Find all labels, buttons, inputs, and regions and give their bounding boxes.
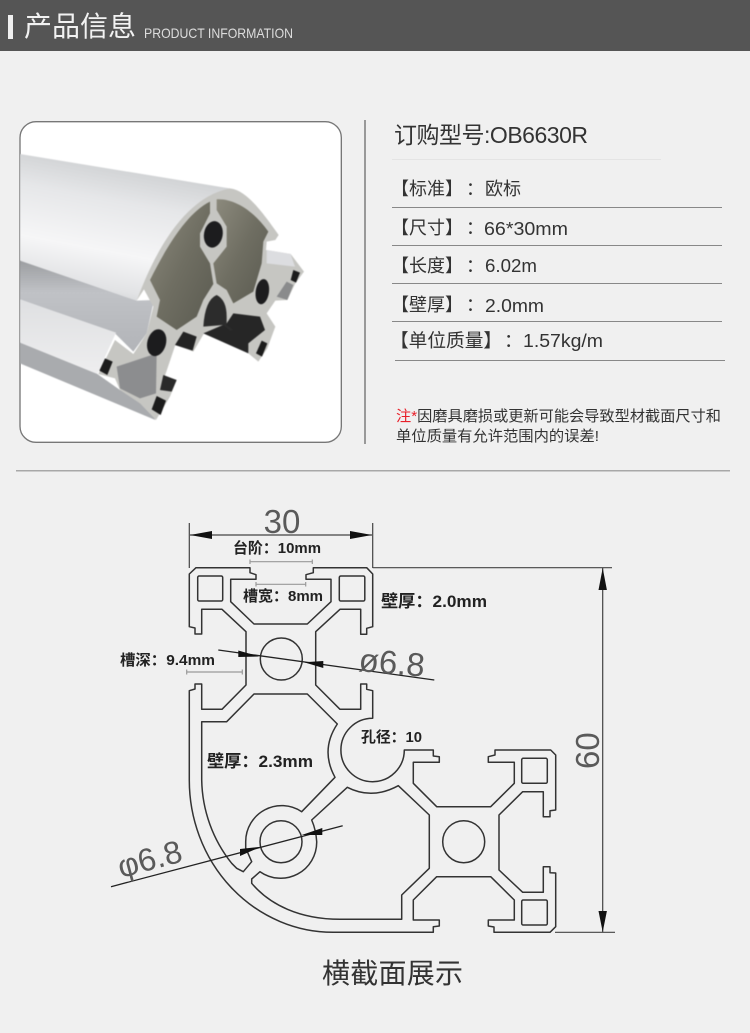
photo: side channel <box>20 261 154 352</box>
height dimension 60 <box>373 568 615 932</box>
spec row: length: 6.02m <box>485 256 537 276</box>
spec row: size: 66*30mm <box>484 219 568 239</box>
label: slot width: 槽宽：8mm <box>243 587 323 605</box>
diameter callout upper: ø6.8 <box>357 641 426 684</box>
order model heading: 订购型号:OB6630R <box>394 122 588 148</box>
header band <box>0 0 750 51</box>
header band: 产品信息 <box>24 11 136 42</box>
inner cavity left <box>202 694 337 872</box>
inner cavity right <box>252 786 429 919</box>
spec row: length: 【长度】 <box>391 256 463 276</box>
spec row: standard <box>391 179 722 208</box>
photo: square holes <box>291 270 300 283</box>
vertical divider <box>364 120 366 444</box>
diameter callout upper <box>218 641 434 684</box>
width dimension 30: 30 <box>264 503 300 540</box>
photo: bottom side <box>20 343 155 420</box>
spec row: wall thickness: 2.0mm <box>485 296 544 316</box>
spec row: standard: 【标准】 <box>391 179 463 199</box>
profile outline <box>189 568 556 932</box>
spec row: size: 【尺寸】 <box>391 218 463 238</box>
photo: lower lip <box>20 299 116 374</box>
spec row: wall thickness: ： <box>466 295 484 315</box>
spec row: unit mass: 【单位质量】 <box>390 330 502 351</box>
note text <box>396 408 721 445</box>
spec row: length <box>391 256 722 284</box>
width dimension 30 <box>189 503 373 568</box>
spec row: unit mass: 1.57kg/m <box>523 331 603 351</box>
spec row: standard: 欧标 <box>485 179 521 199</box>
label: hole diameter: 孔径：10 <box>361 729 422 746</box>
spec row: length: ： <box>466 256 484 276</box>
diameter callout lower: φ6.8 <box>113 833 186 885</box>
spec row: size: ： <box>466 218 484 238</box>
spec table <box>390 179 725 361</box>
photo: end face <box>98 188 304 420</box>
photo: round holes <box>203 220 224 248</box>
panel: product photo <box>20 122 341 442</box>
label: step width: 台阶：10mm <box>233 539 321 557</box>
photo: cavities <box>150 202 213 330</box>
section divider <box>16 470 730 472</box>
photo: rounded top surface <box>20 154 230 301</box>
header band: PRODUCT INFORMATION <box>144 25 293 41</box>
photo: right channel highlight <box>267 250 295 267</box>
photo: dark shadow <box>203 313 265 353</box>
spec row: unit mass: ： <box>504 330 523 351</box>
small gray dimension lines <box>187 560 312 674</box>
spec row: unit mass <box>390 330 725 361</box>
label: wall thickness 2.3: 壁厚：2.3mm <box>207 751 313 771</box>
label: slot depth: 槽深：9.4mm <box>120 651 215 669</box>
photo: bottom channel <box>117 353 157 398</box>
note text: 注*因磨具磨损或更新可能会导致型材截面尺寸和 <box>396 408 721 425</box>
caption: 横截面展示 <box>322 958 463 989</box>
diameter callout lower <box>111 826 343 887</box>
circular bores <box>198 576 547 925</box>
spec row: wall thickness: 【壁厚】 <box>391 295 463 315</box>
cross-section drawing <box>111 503 615 932</box>
label: wall thickness 2.0: 壁厚：2.0mm <box>381 591 487 611</box>
height dimension 60: 60 <box>569 732 606 769</box>
spec row: size <box>391 218 722 246</box>
spec row: wall thickness <box>391 295 722 322</box>
spec row: standard: ： <box>466 179 484 199</box>
note text: 单位质量有允许范围内的误差! <box>396 428 599 445</box>
